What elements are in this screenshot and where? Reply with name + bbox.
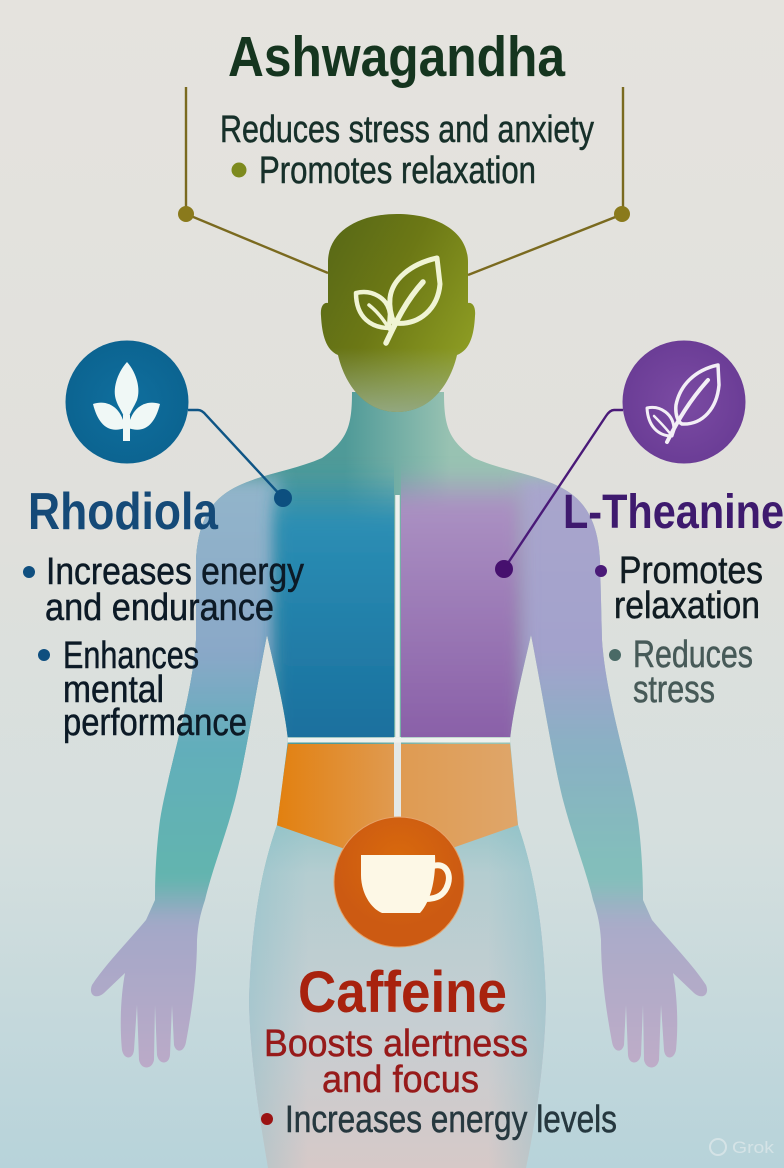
L-Theanine icon and connector bbox=[495, 340, 746, 578]
left arm tone bbox=[91, 472, 286, 1104]
icon: head leaf bbox=[356, 258, 440, 343]
icon: cup bbox=[361, 855, 449, 913]
top connector lines bbox=[178, 87, 630, 275]
benefit text: performance bbox=[63, 702, 247, 744]
heading: Ashwagandha bbox=[228, 25, 566, 89]
benefit lines bbox=[264, 1023, 528, 1101]
bullets bbox=[595, 565, 607, 577]
bullet bbox=[261, 1113, 273, 1125]
Caffeine text block bbox=[261, 960, 617, 1141]
L-Theanine text block bbox=[563, 486, 784, 711]
chest left: blue bbox=[262, 472, 394, 737]
benefit text: Increases energy bbox=[46, 551, 304, 593]
secondary benefit text bbox=[633, 634, 753, 711]
human body figure bbox=[40, 210, 758, 1168]
right arm tone bbox=[514, 475, 707, 1100]
benefit text bbox=[614, 550, 763, 627]
Rhodiola icon and connector bbox=[66, 340, 292, 507]
benefit text: mental bbox=[63, 669, 164, 711]
heading: Caffeine bbox=[298, 960, 507, 1025]
watermark: Grok bbox=[710, 1138, 775, 1157]
benefit lines: and focus bbox=[322, 1059, 479, 1101]
benefit line: Reduces stress and anxiety bbox=[220, 109, 594, 151]
benefit text: Promotes bbox=[619, 550, 763, 592]
abdomen: orange bbox=[276, 744, 518, 848]
bullet bbox=[232, 162, 246, 178]
icon circle bbox=[334, 817, 464, 947]
body silhouette with colour zones bbox=[40, 380, 758, 1168]
benefit line: Promotes relaxation bbox=[259, 150, 536, 192]
benefit line: Increases energy levels bbox=[285, 1099, 617, 1141]
Caffeine icon bbox=[334, 817, 464, 947]
anchor dot bbox=[495, 560, 513, 578]
head bbox=[315, 210, 480, 415]
icon circle bbox=[622, 340, 746, 464]
title: Ashwagandha block bbox=[220, 25, 594, 192]
watermark: Grok: Grok bbox=[732, 1138, 775, 1157]
connector line bbox=[504, 410, 623, 569]
bullets bbox=[23, 566, 35, 578]
benefit text: and endurance bbox=[45, 587, 274, 629]
anchor dot bbox=[274, 489, 292, 507]
Rhodiola text block bbox=[23, 483, 304, 744]
body dividers bbox=[395, 495, 400, 737]
benefit text: Enhances bbox=[63, 635, 199, 677]
heading: Rhodiola bbox=[28, 483, 219, 541]
icon circle bbox=[66, 340, 188, 464]
secondary benefit text: stress bbox=[633, 669, 715, 711]
connector line bbox=[188, 410, 283, 498]
icon: leaves bbox=[647, 365, 719, 442]
secondary benefit text: Reduces bbox=[633, 634, 753, 676]
benefit lines: Boosts alertness bbox=[264, 1023, 528, 1065]
legs bbox=[240, 800, 556, 1168]
chest right: purple bbox=[401, 475, 529, 737]
icon: sprout bbox=[93, 362, 160, 441]
benefit text: relaxation bbox=[614, 585, 760, 627]
benefit text bbox=[45, 551, 304, 744]
